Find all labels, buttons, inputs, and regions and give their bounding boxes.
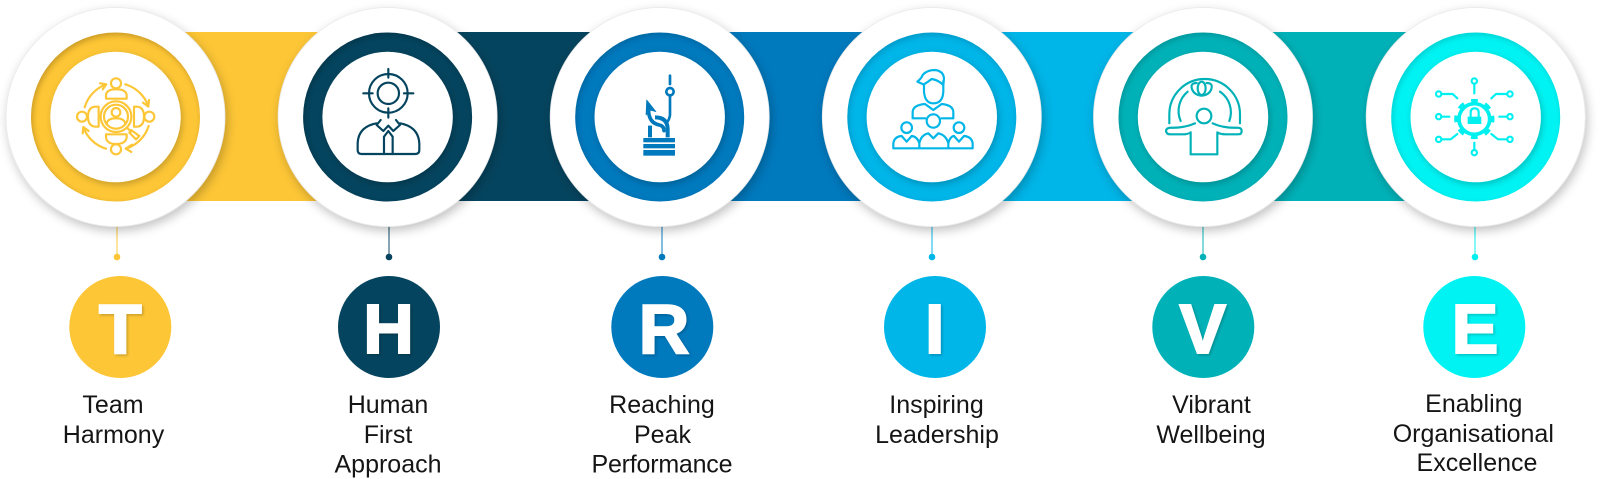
badge ring H (278, 8, 497, 226)
letter circle T: T (99, 290, 142, 368)
label: Human First Approach: Approach (334, 450, 442, 478)
badge ring R (550, 8, 769, 226)
letter circle I: I (925, 290, 944, 368)
label: Reaching Peak Performance (592, 391, 732, 478)
icon: wellbeing figure with lotus (1166, 79, 1242, 154)
panel: R step (550, 8, 769, 478)
label: Enabling Organisational Excellence (1393, 390, 1554, 477)
icon: gear with padlock and circuits (1436, 78, 1513, 155)
letter circle R: R (639, 290, 689, 368)
panel: E step (1366, 8, 1585, 477)
label: Reaching Peak Performance: Peak (634, 421, 691, 449)
connector T (114, 226, 120, 260)
icon: hook and chain (643, 76, 675, 156)
connector E (1472, 226, 1478, 260)
label: Human First Approach: Human (348, 391, 428, 419)
badge ring T (6, 8, 225, 226)
label: Enabling Organisational Excellence: Organisational (1393, 420, 1554, 448)
label: Inspiring Leadership: Inspiring (889, 391, 984, 419)
panel: H step (278, 8, 497, 478)
connector V (1200, 226, 1206, 260)
label: Team Harmony: Harmony (63, 421, 165, 449)
panel: I step (822, 8, 1041, 449)
label: Inspiring Leadership: Leadership (875, 421, 999, 449)
letter circle V: V (1179, 290, 1226, 368)
ribbon: coloured bands (115, 32, 1476, 201)
icon: person with target head (358, 69, 419, 154)
label: Human First Approach (334, 391, 442, 478)
icon: team around magnifier (77, 78, 154, 154)
label: Human First Approach: First (364, 421, 412, 449)
label: Reaching Peak Performance: Performance (592, 450, 732, 478)
icon: leader with audience (893, 70, 973, 148)
badge ring I (822, 8, 1041, 226)
label: Enabling Organisational Excellence: Excellence (1417, 449, 1537, 477)
label: Vibrant Wellbeing: Wellbeing (1156, 421, 1266, 449)
label: Enabling Organisational Excellence: Enabling (1425, 390, 1522, 418)
label: Vibrant Wellbeing (1156, 391, 1266, 449)
label: Team Harmony: Team (82, 391, 144, 419)
connector I (929, 226, 935, 260)
label: Team Harmony (63, 391, 165, 449)
letter circle H: H (363, 290, 414, 368)
panel: V step (1094, 8, 1312, 449)
badge ring V (1094, 8, 1312, 226)
letter circle I (884, 276, 986, 378)
badge ring E (1366, 8, 1585, 226)
letter circle T (69, 276, 171, 378)
letter circle V (1152, 276, 1254, 378)
panel: T step (6, 8, 225, 449)
letter circle R (611, 276, 713, 378)
letter circle H (338, 276, 440, 378)
connector H (386, 226, 392, 260)
connector R (659, 226, 665, 260)
label: Reaching Peak Performance: Reaching (609, 391, 715, 419)
letter circle E (1423, 276, 1525, 378)
label: Inspiring Leadership (875, 391, 999, 449)
letter circle E: E (1452, 290, 1498, 368)
label: Vibrant Wellbeing: Vibrant (1172, 391, 1251, 419)
